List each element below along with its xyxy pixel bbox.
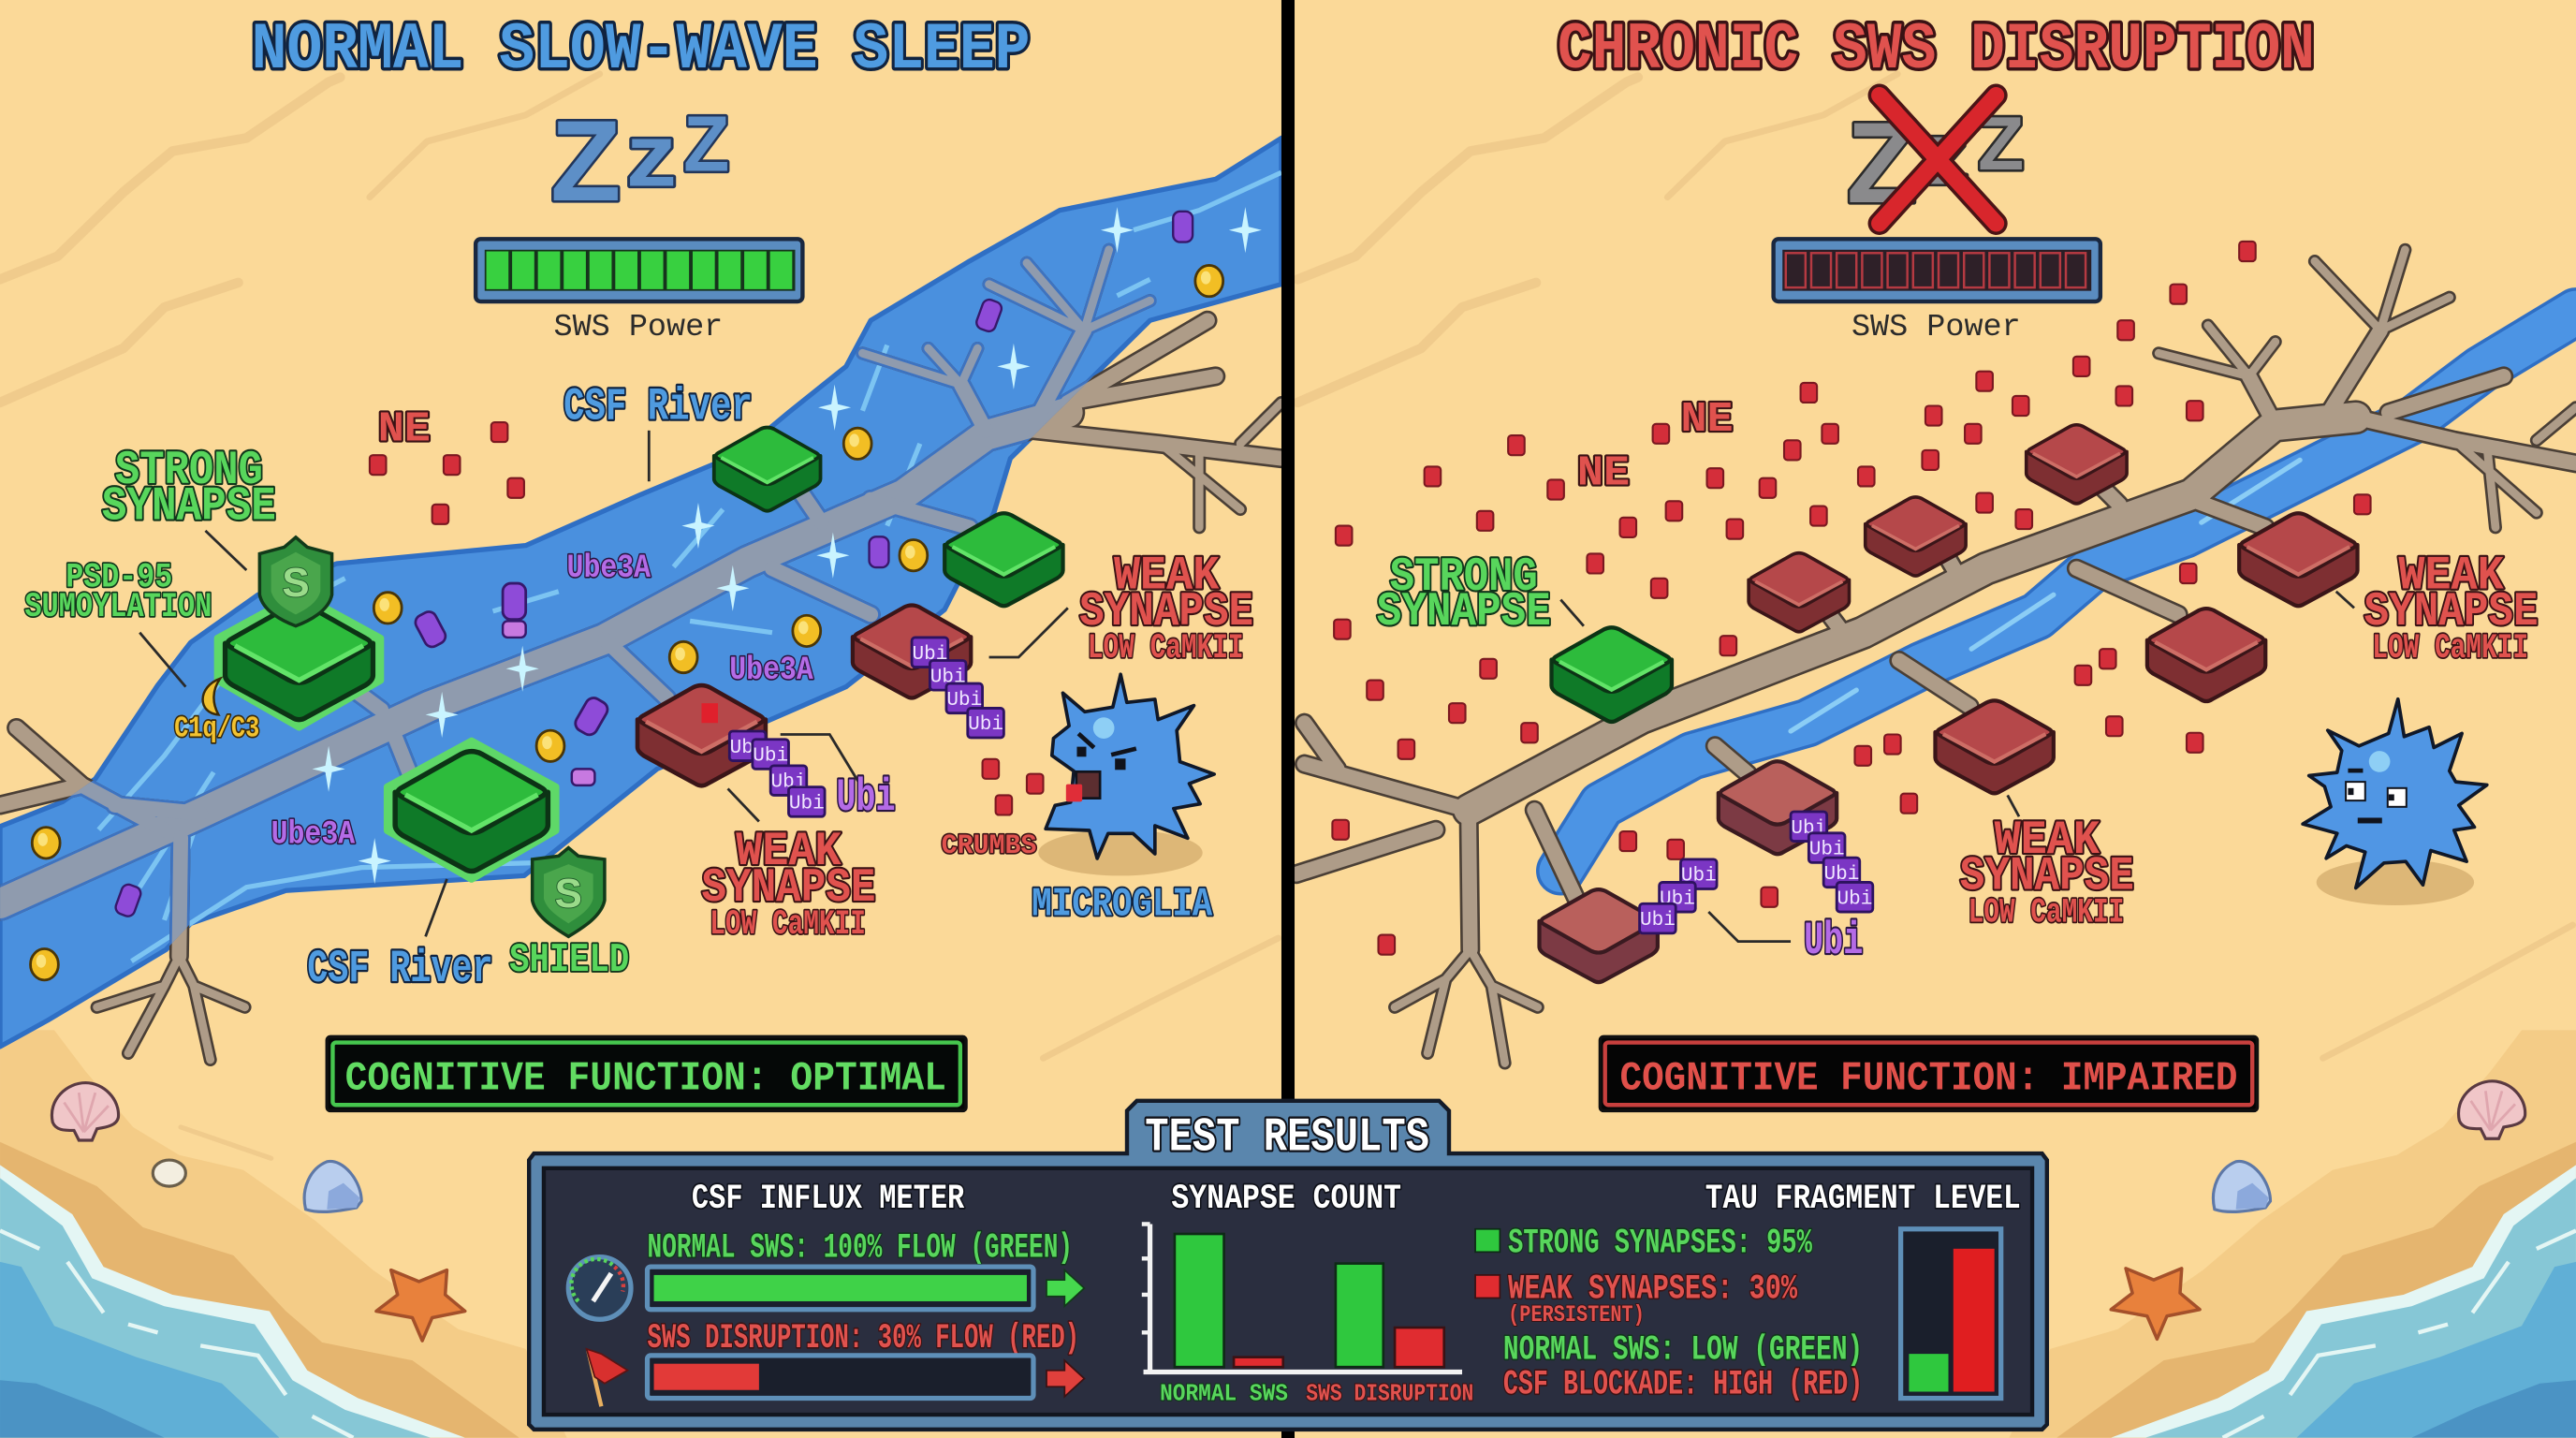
icon: blue shell left (304, 1161, 361, 1211)
synapse: weak 4 (2239, 513, 2358, 606)
panel frame (529, 1101, 2047, 1430)
icon: Zzz (550, 97, 729, 226)
synapses (218, 428, 1063, 879)
label: weak synapse right: LOW CaMKII (1088, 629, 1244, 668)
synapse: weak 6 (1935, 700, 2054, 793)
sparkles (313, 207, 1262, 884)
label: CSF River top: CSF River (564, 381, 753, 433)
SWS power bar: empty (1774, 239, 2100, 301)
synapse: weak 1 (2027, 425, 2127, 504)
label: NE: NE (378, 404, 431, 453)
bar chart: tau level (1901, 1229, 2001, 1399)
label: weak synapse right: LOW CaMKII (2372, 629, 2528, 668)
icon: starfish left (376, 1270, 465, 1341)
icon: pink shell left (51, 1083, 119, 1140)
panel: chronic SWS disruption (1296, 242, 2576, 1064)
synapse: strong (1552, 627, 1672, 722)
synapse: strong large 2 (388, 741, 556, 879)
beach right (2009, 1030, 2576, 1438)
SWS power caption right: SWS Power (1852, 310, 2021, 345)
icon: crossed out Zzz: Z (1847, 99, 1917, 227)
label: strong synapse: SYNAPSE (102, 481, 276, 535)
synapse: weak 2 (1866, 497, 1966, 576)
label: disruption flow: SWS DISRUPTION: 30% FLOW (RED) (648, 1319, 1079, 1358)
synapse: strong (714, 428, 821, 511)
icon: starfish right (2111, 1269, 2200, 1339)
status: cognitive impaired (1600, 1036, 2257, 1110)
bar chart: synapse count (1142, 1224, 1462, 1372)
NE dots (1332, 242, 2371, 955)
shells and starfish (51, 1081, 2525, 1341)
label: shield: SHIELD (509, 937, 629, 984)
label: Ube3A 1: Ube3A (567, 550, 651, 587)
label: Ubi: Ubi (1804, 915, 1863, 967)
label: weak synapse right (2364, 550, 2539, 668)
synapse: strong large (218, 594, 380, 727)
legend: strong: STRONG SYNAPSES: 95% (1508, 1224, 1813, 1263)
legend: tau blockade: CSF BLOCKADE: HIGH (RED) (1503, 1365, 1863, 1404)
icon: Zzz: z (626, 106, 677, 205)
ubi tags: stack 2 (1640, 859, 1717, 933)
label: PSD-95 sumoylation (24, 559, 212, 627)
label: strong synapse (102, 445, 276, 535)
label: strong synapse: STRONG (115, 445, 263, 498)
label: Ubi: Ubi (836, 771, 896, 824)
label: PSD-95 sumoylation: PSD-95 (66, 559, 172, 598)
icon: blue shell right (2213, 1161, 2271, 1211)
label: Ube3A 3: Ube3A (271, 815, 356, 853)
arrow: green (1046, 1270, 1084, 1306)
icon: shield lower: S (555, 871, 582, 917)
CSF river thin (1560, 312, 2576, 871)
ubi tags: lower (729, 731, 825, 816)
dendrite (0, 250, 1281, 1060)
status: cognitive impaired: COGNITIVE FUNCTION: IMPAIRED (1620, 1056, 2237, 1103)
legend: persistent: (PERSISTENT) (1508, 1303, 1645, 1328)
panel: normal slow-wave sleep (0, 138, 1281, 1060)
synapse: weak 3 (1749, 553, 1850, 632)
synapse: strong (944, 513, 1063, 606)
label: weak synapse right: SYNAPSE (2364, 586, 2539, 639)
icon: Zzz: Z (550, 97, 621, 226)
marker on weak synapse (701, 703, 718, 723)
heading: synapse count: SYNAPSE COUNT (1171, 1180, 1401, 1219)
SWS power bar: full (476, 239, 802, 301)
icon: C1q moon (203, 679, 220, 714)
label: weak synapse lower (1960, 814, 2134, 933)
label: PSD-95 sumoylation: SUMOYLATION (24, 588, 212, 627)
label: weak synapse right: WEAK (1114, 550, 1220, 603)
title: disruption: CHRONIC SWS DISRUPTION (1558, 14, 2315, 88)
icon: shield on strong synapse: S (282, 560, 310, 606)
legend: weak: WEAK SYNAPSES: 30% (1508, 1269, 1798, 1309)
label: microglia: MICROGLIA (1032, 882, 1213, 929)
leader lines (1560, 592, 2354, 942)
icon: gauge (568, 1257, 631, 1319)
SWS power caption left: SWS Power (554, 310, 723, 345)
synapse: weak 5 (2147, 609, 2265, 701)
label: weak synapse lower: WEAK (1995, 814, 2100, 868)
icon: pebble (153, 1160, 185, 1186)
icon: crossed out Zzz (1847, 95, 2024, 227)
label: strong synapse: STRONG (1390, 551, 1538, 605)
label: weak synapse lower: WEAK (736, 826, 842, 879)
center divider (1281, 0, 1295, 1438)
label: weak synapse lower: LOW CaMKII (710, 905, 866, 945)
heading: tau fragment level: TAU FRAGMENT LEVEL (1705, 1180, 2021, 1219)
microglia: idle (2303, 699, 2487, 905)
gold coins (31, 265, 1223, 980)
purple fragments (114, 212, 1193, 918)
label: weak synapse lower: LOW CaMKII (1969, 894, 2124, 933)
flow bar: disruption (648, 1356, 1033, 1399)
label: NE 2: NE (1577, 449, 1630, 498)
label: weak synapse right (1079, 550, 1253, 668)
label: weak synapse right: WEAK (2398, 550, 2504, 603)
microglia: eating (1038, 674, 1214, 875)
NE dots (370, 422, 524, 524)
label: strong synapse (1377, 551, 1551, 639)
heading: CSF influx meter: CSF INFLUX METER (692, 1180, 965, 1219)
icon: shield on strong synapse (259, 537, 332, 626)
icon: red flag (587, 1349, 627, 1406)
label: strong synapse: SYNAPSE (1377, 586, 1551, 639)
heading: test results: TEST RESULTS (1145, 1112, 1429, 1166)
label: C1q/C3: C1q/C3 (174, 712, 259, 745)
arrow: red (1046, 1360, 1084, 1397)
status: cognitive optimal (327, 1036, 966, 1110)
status: cognitive optimal: COGNITIVE FUNCTION: OPTIMAL (345, 1056, 946, 1103)
dendrite (1296, 250, 2576, 1064)
label: weak synapse lower: SYNAPSE (1960, 850, 2134, 903)
ubi tags: stack 1 (1791, 812, 1873, 912)
label: crumbs: CRUMBS (942, 829, 1036, 861)
icon: pink shell right (2459, 1081, 2525, 1138)
title: normal: NORMAL SLOW-WAVE SLEEP (252, 14, 1030, 88)
beach left (0, 1030, 567, 1438)
icon: shield lower (533, 848, 605, 936)
chart label: normal: NORMAL SWS (1160, 1379, 1288, 1407)
panel: test results (529, 1101, 2047, 1430)
icon: Zzz: Z (683, 100, 729, 188)
synapses (1540, 425, 2358, 982)
icon: crossed out Zzz: z (1919, 105, 1969, 204)
flow bar: normal (648, 1267, 1033, 1310)
label: NE 1: NE (1680, 395, 1734, 444)
synapse: weak 7 (1719, 761, 1837, 854)
label: weak synapse right: SYNAPSE (1079, 586, 1253, 639)
CSF river (0, 138, 1281, 1047)
label: weak synapse lower (701, 826, 875, 945)
sand ripples (0, 74, 2572, 1158)
label: normal flow: NORMAL SWS: 100% FLOW (GREEN) (648, 1229, 1073, 1269)
label: Ube3A 2: Ube3A (729, 652, 814, 689)
synapse: weak (637, 685, 766, 785)
legend: strong (1475, 1224, 1813, 1263)
synapse: weak (853, 606, 971, 698)
label: weak synapse lower: SYNAPSE (701, 862, 875, 916)
synapse: weak 8 (1540, 889, 1658, 982)
legend: tau normal: NORMAL SWS: LOW (GREEN) (1503, 1330, 1863, 1370)
chart label: disruption: SWS DISRUPTION (1306, 1379, 1473, 1407)
leader lines (139, 431, 1068, 936)
label: CSF River lower: CSF River (307, 943, 493, 995)
crumbs (983, 759, 1044, 814)
ubi tags: upper (912, 638, 1003, 738)
icon: crossed out Zzz: Z (1978, 102, 2024, 186)
